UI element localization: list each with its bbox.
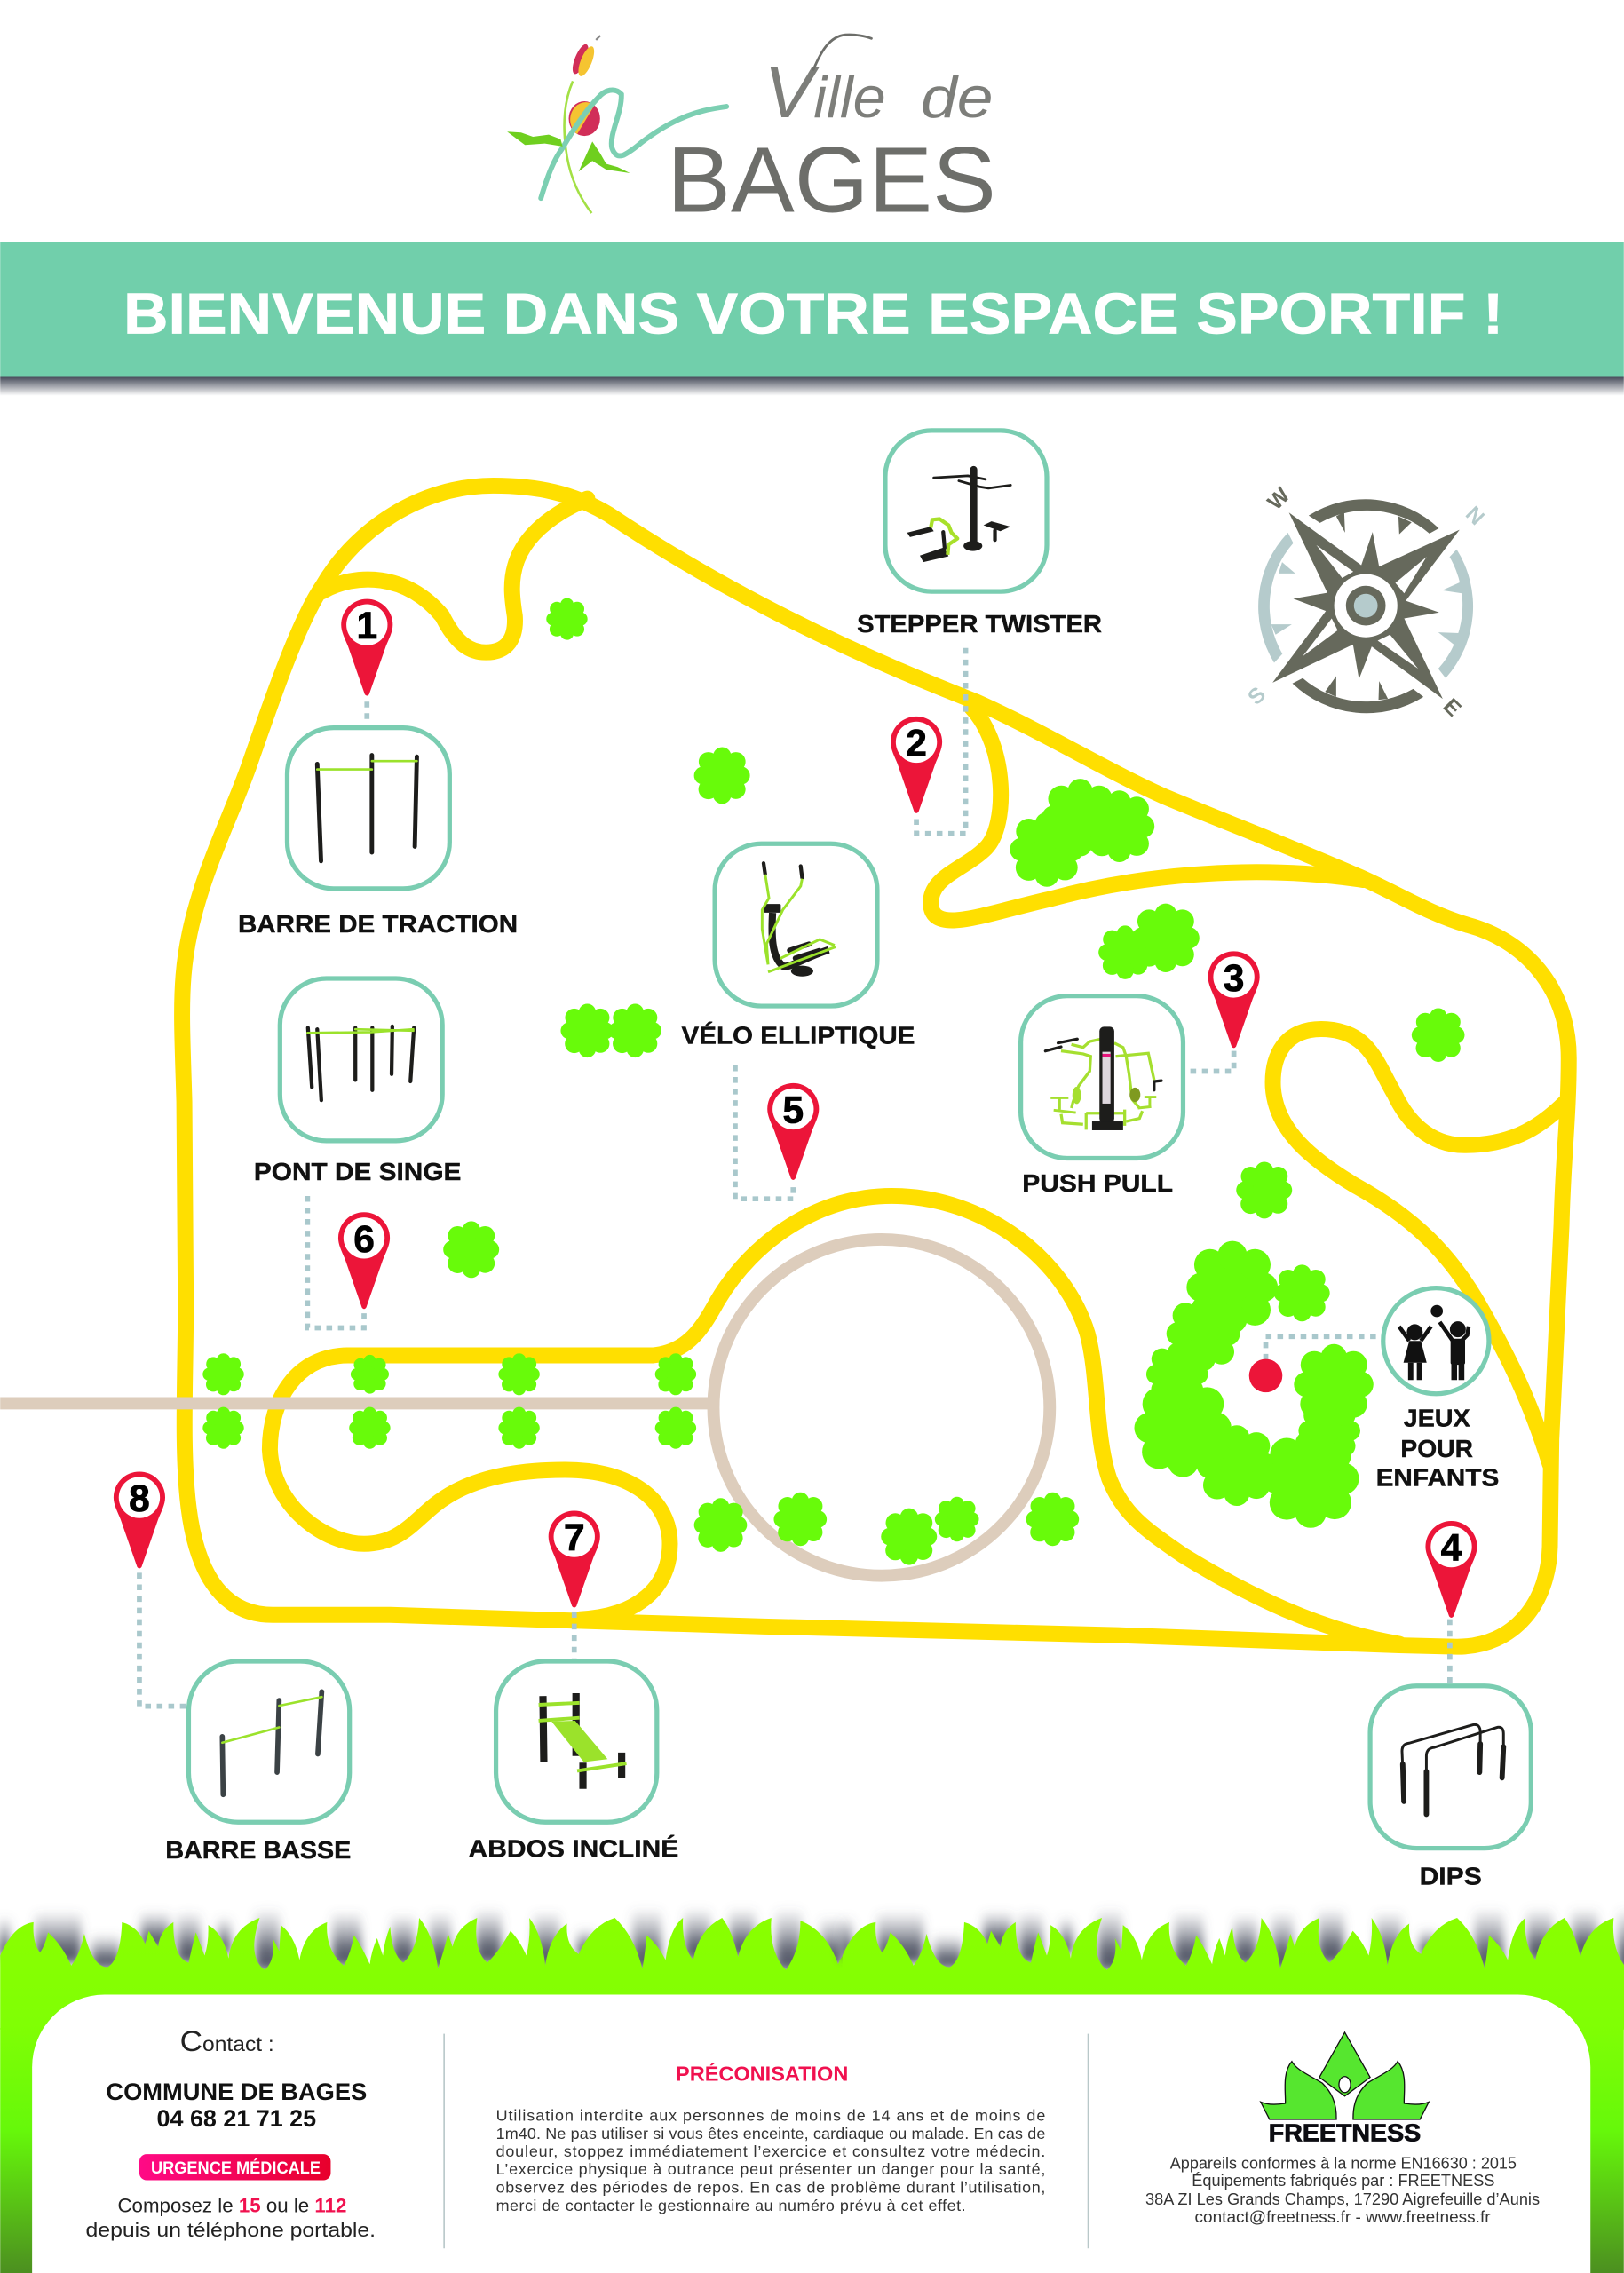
phone number: 04 68 21 71 25 [157,2105,316,2132]
recommendation text [496,2107,1045,2214]
equipment: jeux pour enfants [1249,1288,1499,1491]
recommendation text: Utilisation interdite aux personnes de moins de 14 ans et de moins de [496,2107,1045,2125]
compass ring dark arcs [1293,499,1438,713]
label: ENFANTS [1376,1463,1499,1491]
map: beige path and circle [0,1239,1050,1576]
card [188,1661,350,1822]
equipment: abdos incline [469,1661,678,1862]
pin 4 [1425,1521,1477,1618]
card [496,1661,657,1822]
pin 1: 1 [356,605,377,646]
pin 8 [114,1471,165,1569]
pin 7: 7 [564,1517,585,1558]
grass band [0,1908,1624,2273]
icon: incline bench [539,1693,627,1789]
icon: stepper twister [907,470,1010,562]
equipment: barre de traction [238,728,518,938]
icon: children playing [1399,1305,1469,1380]
contact heading: Contact : [180,2024,274,2057]
manufacturer text: Équipements fabriqués par : FREETNESS [1192,2171,1494,2190]
icon: elliptical bike [762,863,836,977]
recommendation text: douleur, stoppez immédiatement l’exercice et consultez votre médecin. [496,2142,1045,2160]
dotted connectors [139,648,1450,1707]
footer panel [32,1995,1590,2273]
title: BIENVENUE DANS VOTRE ESPACE SPORTIF ! [123,281,1503,346]
icon: low bars [222,1691,321,1794]
label [1376,1405,1499,1491]
card [1370,1686,1531,1849]
pin 8: 8 [129,1477,150,1519]
label: VÉLO ELLIPTIQUE [682,1022,915,1049]
manufacturer text: Appareils conformes à la norme EN16630 : 2015 [1170,2153,1517,2172]
label: PONT DE SINGE [254,1158,461,1185]
red location dot [1249,1359,1282,1392]
contact block [86,2024,376,2241]
card [715,843,877,1006]
card [1021,996,1183,1158]
recommendation text: L’exercice physique à outrance peut présenter un danger pour la santé, [496,2160,1045,2178]
logo emblem: flower figure [507,36,726,213]
emergency badge: URGENCE MÉDICALE [151,2158,321,2178]
trees [202,598,1464,1565]
icon: dip bars [1402,1724,1503,1814]
logo text: de: de [921,65,994,130]
freetness logo [1261,2032,1429,2146]
compass ring light arcs [1258,533,1473,678]
emergency badge [139,2154,330,2181]
pin 3 [1208,951,1260,1048]
label: POUR [1400,1435,1473,1462]
recommendation text: observez des périodes de repos. En cas de problème durant l’utilisation, [496,2178,1045,2196]
manufacturer text: 38A ZI Les Grands Champs, 17290 Aigrefeuille d’Aunis [1145,2190,1540,2208]
recommendation block [496,2063,1045,2214]
logo flourish [813,35,871,69]
compass hub [1335,574,1398,638]
pin 6: 6 [353,1218,375,1260]
compass letter W: W [1264,483,1295,515]
manufacturer text [1145,2153,1540,2226]
card [287,728,449,889]
title banner [0,242,1624,396]
label: BARRE BASSE [165,1836,351,1864]
pin 7 [549,1511,600,1608]
compass star [1272,512,1460,699]
recommendation text: 1m40. Ne pas utiliser si vous êtes enceinte, cardiaque ou malade. En cas de [496,2125,1045,2142]
pin 3: 3 [1224,957,1244,999]
card [280,978,442,1141]
emergency note: depuis un téléphone portable. [86,2219,376,2241]
label: ABDOS INCLINÉ [469,1834,678,1862]
pin 5: 5 [782,1089,804,1130]
equipment: dips [1370,1686,1531,1889]
freetness wordmark: FREETNESS [1269,2119,1421,2146]
compass star highlights [1303,545,1427,669]
label: PUSH PULL [1022,1169,1173,1197]
equipment: stepper twister [857,431,1102,638]
pin 2: 2 [906,722,927,764]
icon: push pull machine [1045,1026,1161,1130]
pin 4: 4 [1441,1527,1462,1569]
manufacturer block [1145,2032,1540,2226]
compass letter N: N [1461,502,1489,530]
pin 6 [338,1212,390,1309]
compass [1243,483,1489,721]
equipment: velo elliptique [682,843,915,1049]
compass letter E: E [1438,694,1465,721]
label: STEPPER TWISTER [857,610,1102,638]
label: JEUX [1404,1405,1470,1432]
equipment: barre basse [165,1661,351,1864]
equipment: pont de singe [254,978,461,1185]
card [885,431,1047,591]
recommendation text: merci de contacter le gestionnaire au numéro prévu à cet effet. [496,2197,966,2214]
logo text: Ville: Ville [764,52,886,133]
map: yellow paths [182,486,1569,1647]
recommendation heading: PRÉCONISATION [676,2063,848,2086]
icon: pull-up bars [317,756,416,861]
commune name: COMMUNE DE BAGES [106,2079,367,2105]
label: BARRE DE TRACTION [238,910,518,938]
divider right [1088,2034,1089,2248]
circle card [1383,1288,1489,1394]
equipment: push pull [1021,996,1183,1197]
logo text: BAGES: BAGES [667,128,996,232]
logo: Ville de Bages [507,35,996,232]
compass letter S: S [1243,683,1271,709]
pin 2 [891,717,942,813]
icon: monkey bridge [307,1026,414,1100]
divider left [443,2034,445,2248]
emergency numbers: Composez le 15 ou le 112 [117,2194,346,2216]
pin 1 [341,599,392,696]
manufacturer text: contact@freetness.fr - www.freetness.fr [1195,2207,1491,2226]
label: DIPS [1420,1862,1482,1889]
pin 5 [767,1083,819,1180]
